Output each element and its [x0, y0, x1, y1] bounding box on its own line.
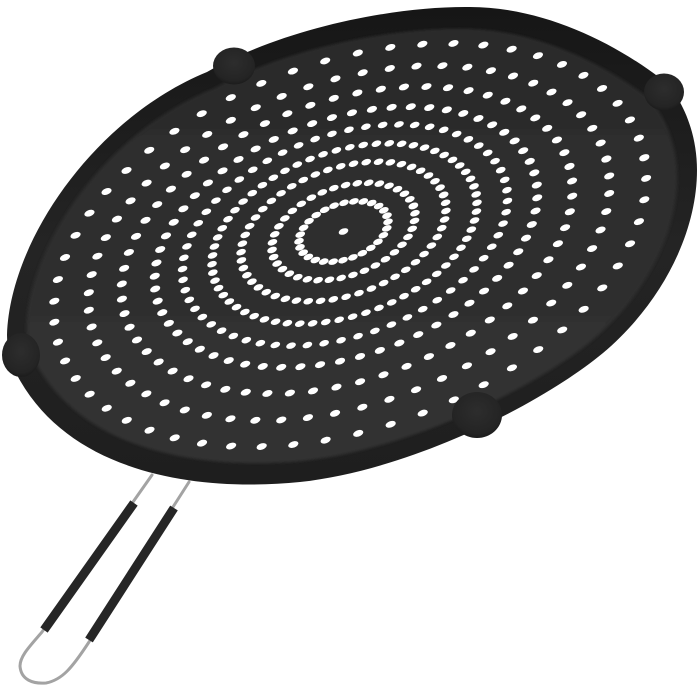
ring 3: [222, 136, 465, 327]
ring 9: [23, 0, 677, 514]
centre hole: [338, 227, 349, 236]
knob: right: [644, 74, 684, 110]
ring 5: [155, 84, 535, 386]
knob: top: [213, 48, 255, 84]
hole rings: [23, 0, 677, 514]
perforated panel: [26, 29, 677, 463]
handle: [20, 475, 189, 683]
ring 6: [124, 59, 568, 415]
handle wire loop: [20, 475, 189, 683]
knob: bottom: [452, 392, 502, 438]
ring 4: [187, 109, 502, 358]
left handle sleeve: [44, 503, 134, 630]
ring 8: [51, 3, 647, 483]
right handle sleeve: [89, 508, 174, 640]
ring 7: [88, 32, 606, 448]
ring 2: [258, 165, 429, 298]
rim: [7, 7, 697, 484]
knob: left: [2, 333, 40, 377]
ring 1: [291, 190, 396, 273]
